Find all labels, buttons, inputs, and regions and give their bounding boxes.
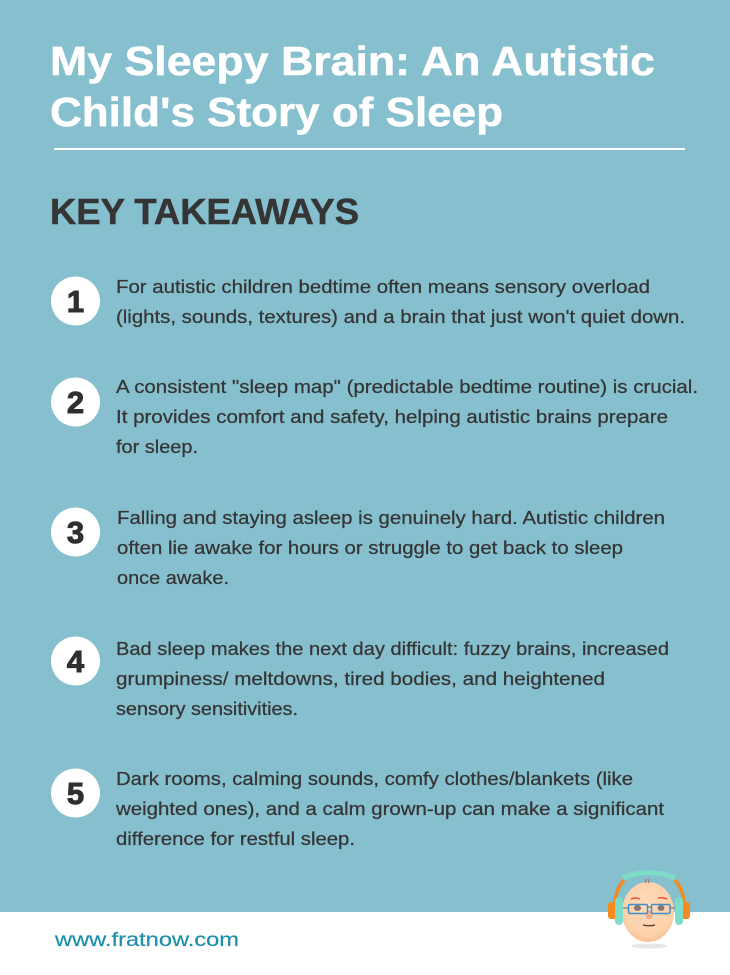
number badge 4: 4 (67, 644, 85, 679)
number badge 3: 3 (67, 515, 84, 550)
takeaway 3 text (117, 507, 665, 588)
takeaway 2 text: It provides comfort and safety, helping autistic brains prepare (116, 406, 668, 427)
icon: child with headphones (608, 873, 690, 948)
takeaway 4 text: sensory sensitivities. (116, 698, 298, 719)
takeaway 4 text: Bad sleep makes the next day difficult: fuzzy brains, increased (116, 638, 669, 659)
takeaway 4 text: grumpiness/ meltdowns, tired bodies, and heightened (116, 668, 605, 689)
number badge 1: 1 (67, 284, 84, 319)
takeaway 3 (51, 507, 665, 588)
number badge 3 (51, 508, 100, 556)
takeaway 3 text: once awake. (117, 567, 229, 588)
number badge 2: 2 (67, 385, 84, 420)
takeaway 2 text (116, 376, 698, 457)
number badge 1 (51, 276, 100, 326)
takeaway 4 text (116, 638, 669, 719)
takeaway 5 text: Dark rooms, calming sounds, comfy clothes/blankets (like (116, 768, 633, 789)
number badge 2 (51, 378, 100, 426)
number badge 5 (51, 768, 100, 818)
takeaway 1 (51, 276, 685, 327)
footer band (0, 912, 730, 975)
takeaway 5 text: weighted ones), and a calm grown-up can make a significant (115, 798, 664, 819)
takeaway 5 text (115, 768, 664, 849)
heading: key takeaways: KEY TAKEAWAYS (50, 191, 359, 232)
takeaway 3 text: often lie awake for hours or struggle to get back to sleep (117, 537, 623, 558)
number badge 5: 5 (67, 776, 84, 811)
title: My Sleepy Brain: An Autistic (50, 38, 655, 84)
takeaway 2 text: for sleep. (116, 436, 198, 457)
takeaway 1 text: (lights, sounds, textures) and a brain that just won't quiet down. (116, 306, 685, 327)
takeaway 1 text: For autistic children bedtime often means sensory overload (116, 276, 650, 297)
takeaway 1 text (116, 276, 685, 327)
takeaway 2 text: A consistent "sleep map" (predictable bedtime routine) is crucial. (116, 376, 698, 397)
takeaway 2 (51, 376, 698, 457)
takeaway 4 (51, 636, 669, 719)
title (50, 38, 655, 135)
title: Child's Story of Sleep (50, 89, 503, 135)
takeaway 5 (51, 768, 664, 849)
takeaway 3 text: Falling and staying asleep is genuinely hard. Autistic children (117, 507, 665, 528)
takeaway 5 text: difference for restful sleep. (116, 828, 355, 849)
number badge 4 (51, 636, 100, 686)
website url: www.fratnow.com (54, 929, 239, 951)
